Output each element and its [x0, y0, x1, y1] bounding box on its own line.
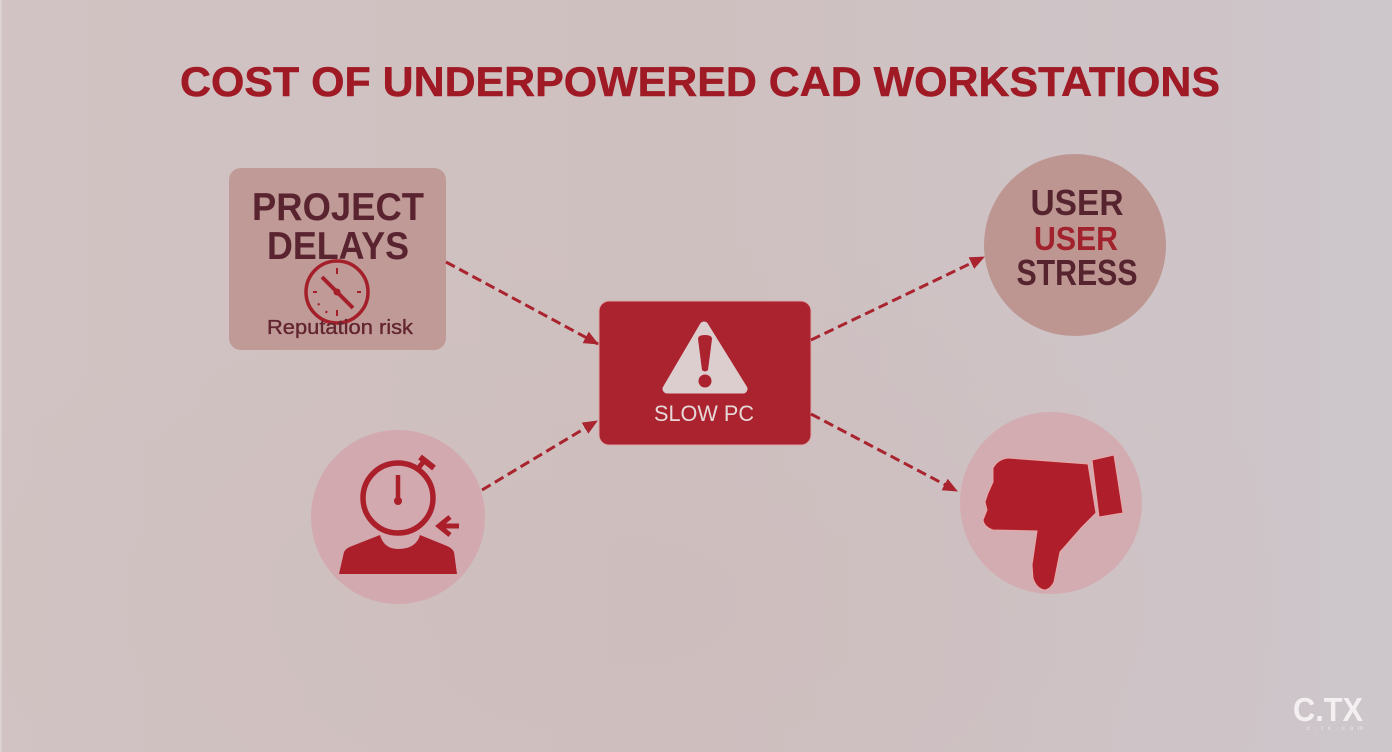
arrow: slow pc to user stress [811, 257, 984, 340]
text: user stress: USER [1030, 182, 1124, 223]
panel: lost time [311, 430, 485, 604]
panel: slow pc [599, 301, 811, 445]
icon: thumbs down [983, 455, 1123, 590]
arrow: lost time to slow pc [482, 421, 597, 490]
label: slow pc: SLOW PC [654, 401, 754, 426]
logo: C.TX [1293, 691, 1363, 728]
text: user stress [1016, 182, 1138, 293]
icon: person body [339, 535, 457, 574]
icon: warning triangle [667, 326, 743, 389]
icon: clock [306, 261, 368, 323]
arrow: slow pc to thumbs down [811, 414, 957, 491]
heading: project delays: PROJECT [252, 186, 424, 229]
title: COST OF UNDERPOWERED CAD WORKSTATIONS [180, 58, 1220, 105]
panel: thumbs down [960, 412, 1142, 594]
heading: project delays [252, 186, 424, 268]
text: user stress: STRESS [1016, 252, 1138, 293]
text: user stress: USER [1034, 220, 1118, 257]
text: reputation risk: Reputation risk [267, 317, 414, 339]
icon: small arrow [439, 517, 459, 535]
heading: project delays: DELAYS [267, 225, 409, 268]
icon: stopwatch head [363, 457, 434, 533]
logo: c.tx.com [1307, 726, 1363, 732]
panel: user stress [984, 154, 1166, 336]
arrow: delays to slow pc [446, 262, 598, 344]
panel: project delays [229, 168, 446, 350]
